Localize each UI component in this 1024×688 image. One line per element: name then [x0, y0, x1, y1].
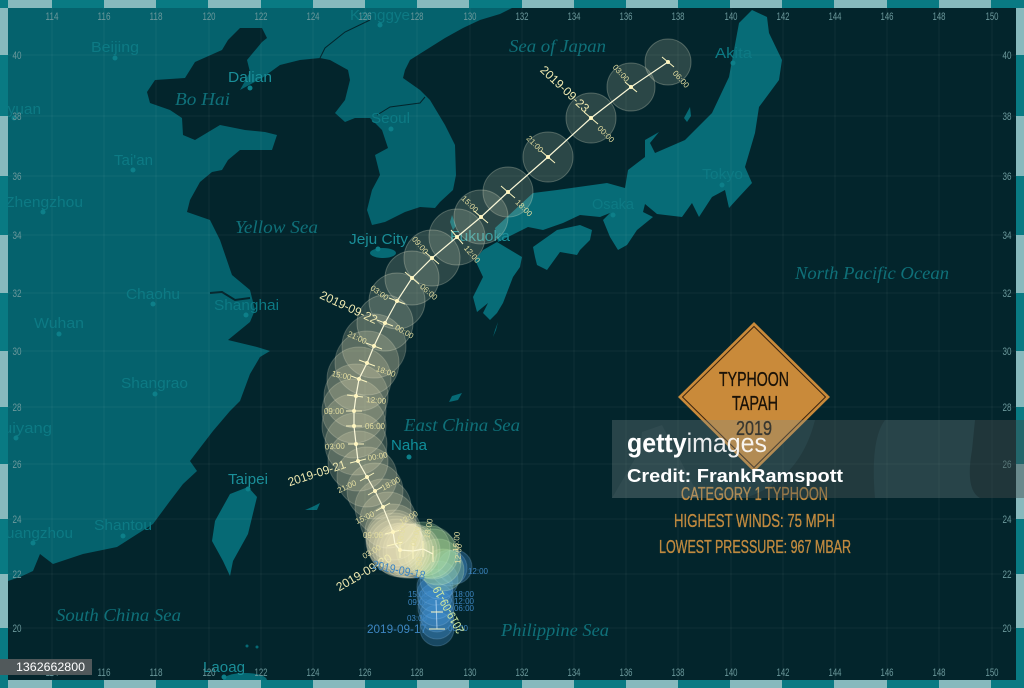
latitude axis labels: 34 [1002, 230, 1012, 242]
longitude axis labels: 150 [986, 11, 998, 23]
time labels: 06:00 [454, 604, 475, 613]
time labels: 21:00 [346, 329, 369, 346]
land: Shikoku [533, 225, 592, 270]
date labels [286, 63, 592, 636]
longitude axis labels: 140 [724, 11, 738, 23]
storm statistics [659, 484, 851, 557]
land: Taiwan [212, 487, 257, 576]
city labels: Tokyo [702, 166, 743, 183]
land masses [8, 8, 782, 687]
image id tag [0, 659, 92, 675]
latitude axis labels: 26 [12, 459, 22, 471]
time labels: 06:00 [671, 69, 691, 90]
date labels: 2019-09-23 [537, 63, 592, 116]
latitude axis labels: 24 [1002, 514, 1012, 526]
city labels: Tai'an [114, 152, 153, 169]
longitude axis labels: 144 [828, 667, 842, 679]
sea labels: East China Sea [403, 415, 520, 435]
longitude axis labels: 130 [464, 667, 476, 679]
city labels: Naha [391, 437, 428, 454]
time labels: 06:00 [395, 523, 408, 545]
time labels: 09:00 [408, 598, 429, 607]
time labels: 12:00 [462, 244, 482, 265]
time labels: 06:00 [418, 282, 440, 302]
typhoon track [286, 39, 691, 646]
latitude axis labels: 36 [1002, 171, 1012, 183]
longitude axis labels: 140 [724, 667, 738, 679]
longitude axis labels: 126 [358, 667, 372, 679]
city labels: Fukuoka [450, 228, 511, 245]
date labels: 2019-09-21 [286, 457, 348, 489]
latitude axis labels: 26 [1002, 459, 1012, 471]
sign: storm title: TAPAH [732, 393, 778, 415]
city labels: Chaohu [126, 286, 180, 303]
watermark credit text: Credit: FrankRamspott [627, 466, 843, 486]
city labels: Akita [715, 45, 753, 62]
watermark logo text: gettyimages [627, 428, 767, 458]
time labels: 12:00 [366, 395, 387, 406]
time labels: 12:00 [468, 567, 489, 576]
time labels: 18:00 [454, 590, 475, 599]
city labels: Zhengzhou [5, 194, 83, 211]
longitude axis labels: 116 [98, 667, 110, 679]
latitude axis labels: 32 [1002, 288, 1012, 300]
sea labels: Bo Hai [175, 89, 230, 109]
city labels: Taipei [228, 471, 268, 488]
time labels: 09:00 [414, 557, 423, 578]
time labels: 03:00 [611, 63, 631, 84]
longitude axis labels: 124 [306, 11, 320, 23]
sign: storm title: 2019 [736, 418, 772, 440]
longitude axis labels: 122 [254, 11, 268, 23]
time labels: 15:00 [331, 369, 353, 382]
city labels: Shangrao [121, 375, 188, 392]
longitude axis labels: 142 [776, 667, 790, 679]
longitude axis labels: 116 [98, 11, 110, 23]
latitude axis labels: 24 [12, 514, 22, 526]
time labels: 06:00 [365, 422, 386, 431]
longitude axis labels: 148 [932, 11, 946, 23]
wind radius circles: early depression stage [417, 550, 472, 646]
time labels: 21:00 [525, 134, 545, 155]
storm statistics: LOWEST PRESSURE: 967 MBAR [659, 537, 851, 557]
longitude axis labels: 134 [568, 667, 580, 679]
longitude axis labels: 146 [880, 667, 894, 679]
latitude axis labels: 28 [1002, 402, 1012, 414]
land: Kyushu [473, 242, 522, 320]
longitude axis labels: 118 [150, 11, 162, 23]
time labels [324, 63, 691, 633]
track position markers [352, 60, 670, 552]
date labels: 2019-09-17 [367, 622, 427, 636]
rivers [210, 20, 425, 300]
latitude axis labels: 36 [12, 171, 22, 183]
longitude axis labels: 132 [516, 11, 528, 23]
city labels: Kanggye [350, 7, 410, 24]
time labels: 03:00 [325, 441, 346, 452]
sea labels: Philippine Sea [500, 620, 609, 640]
date labels: 2019-09-20 [334, 551, 395, 594]
time labels: 18:00 [375, 364, 397, 379]
longitude axis labels: 134 [568, 11, 580, 23]
latitude axis labels: 28 [12, 402, 22, 414]
city labels: Seoul [371, 110, 410, 127]
storm info sign [659, 322, 851, 557]
wind radius circles: northern stage [357, 39, 691, 351]
time labels: 03:00 [369, 284, 391, 303]
land: Jeju island [370, 248, 396, 258]
latitude axis labels: 30 [1002, 346, 1012, 358]
time labels: 00:00 [448, 624, 469, 633]
longitude axis labels: 130 [464, 11, 476, 23]
time labels: 00:00 [393, 323, 416, 341]
longitude axis labels: 146 [880, 11, 894, 23]
city labels: Osaka [592, 196, 635, 213]
time labels: 15:00 [451, 531, 462, 552]
time labels: 00:00 [367, 450, 389, 463]
land: Honshu [495, 10, 782, 250]
track ticks [346, 57, 674, 629]
city labels: Jeju City [349, 231, 408, 248]
date labels: 2019-09-19 [430, 584, 467, 636]
latitude axis labels: 20 [12, 623, 22, 635]
latitude axis labels: 22 [1002, 569, 1012, 581]
sea labels [56, 36, 949, 640]
time labels: 12:00 [398, 509, 420, 527]
latitude axis labels: 22 [12, 569, 22, 581]
latitude axis labels: 20 [1002, 623, 1012, 635]
time labels: 15:00 [408, 590, 429, 599]
longitude axis labels: 114 [46, 667, 58, 679]
longitude axis labels: 144 [828, 11, 842, 23]
time labels: 18:00 [380, 475, 402, 492]
land: mainland Asia and Korea [8, 8, 512, 581]
watermark banner [612, 420, 1024, 498]
time labels: 15:00 [354, 509, 376, 526]
longitude axis labels: 138 [672, 667, 684, 679]
city labels: Dalian [228, 69, 272, 86]
time labels: 12:00 [453, 543, 464, 564]
storm statistics: HIGHEST WINDS: 75 MPH [674, 511, 835, 531]
longitude axis labels: 128 [410, 11, 424, 23]
longitude axis labels: 132 [516, 667, 528, 679]
wind radius circles: transition stage [396, 522, 464, 591]
wind radius circles: typhoon stage [322, 314, 440, 578]
time labels: 15:00 [460, 194, 480, 215]
time labels: 00:00 [596, 124, 616, 145]
sea labels: North Pacific Ocean [794, 263, 949, 283]
city labels: Laoag [203, 659, 245, 676]
longitude axis labels: 120 [202, 11, 216, 23]
time labels: 21:00 [336, 478, 358, 495]
longitude axis labels: 150 [986, 667, 998, 679]
date labels: 2019-09-18 [371, 558, 427, 583]
latitude axis labels: 38 [1002, 111, 1012, 123]
city labels: Shanghai [214, 297, 279, 314]
latitude axis labels: 30 [12, 346, 22, 358]
time labels: 03:00 [407, 614, 428, 623]
sea labels: South China Sea [56, 605, 181, 625]
time labels: 03:00 [361, 543, 383, 561]
sign: diamond [678, 322, 830, 472]
date labels: 2019-09-22 [318, 288, 380, 327]
storm statistics: CATEGORY 1 TYPHOON [681, 484, 828, 504]
city labels: Wuhan [34, 315, 84, 332]
longitude axis labels: 126 [358, 11, 372, 23]
sign: storm title: TYPHOON [719, 369, 789, 391]
time labels: 00:00 [409, 525, 423, 547]
track line [354, 62, 668, 554]
sign: storm title [719, 369, 789, 440]
city labels: Beijing [91, 39, 139, 56]
longitude axis labels: 142 [776, 11, 790, 23]
latitude axis labels: 40 [1002, 50, 1012, 62]
longitude axis labels: 136 [620, 11, 632, 23]
city labels: Shantou [94, 517, 152, 534]
latitude axis labels: 38 [12, 111, 22, 123]
time labels: 09:00 [324, 407, 345, 416]
time labels: 18:00 [514, 198, 534, 219]
time labels: 09:00 [410, 235, 430, 256]
longitude axis labels: 148 [932, 667, 946, 679]
latitude axis labels: 40 [12, 50, 22, 62]
longitude axis labels: 114 [46, 11, 58, 23]
longitude axis labels: 128 [410, 667, 424, 679]
longitude axis labels: 118 [150, 667, 162, 679]
sea labels: Yellow Sea [235, 217, 318, 237]
longitude axis labels: 122 [254, 667, 268, 679]
longitude axis labels: 138 [672, 11, 684, 23]
time labels: 12:00 [454, 597, 475, 606]
land: small islands [223, 107, 691, 687]
image id tag: 1362662800 [16, 660, 85, 674]
latitude axis labels: 34 [12, 230, 22, 242]
time labels: 09:00 [363, 531, 384, 540]
sea labels: Sea of Japan [509, 36, 606, 56]
time labels: 18:00 [422, 517, 435, 539]
latitude axis labels: 32 [12, 288, 22, 300]
city labels [0, 7, 753, 680]
longitude axis labels: 136 [620, 667, 632, 679]
longitude axis labels: 124 [306, 667, 320, 679]
longitude axis labels: 120 [202, 667, 216, 679]
